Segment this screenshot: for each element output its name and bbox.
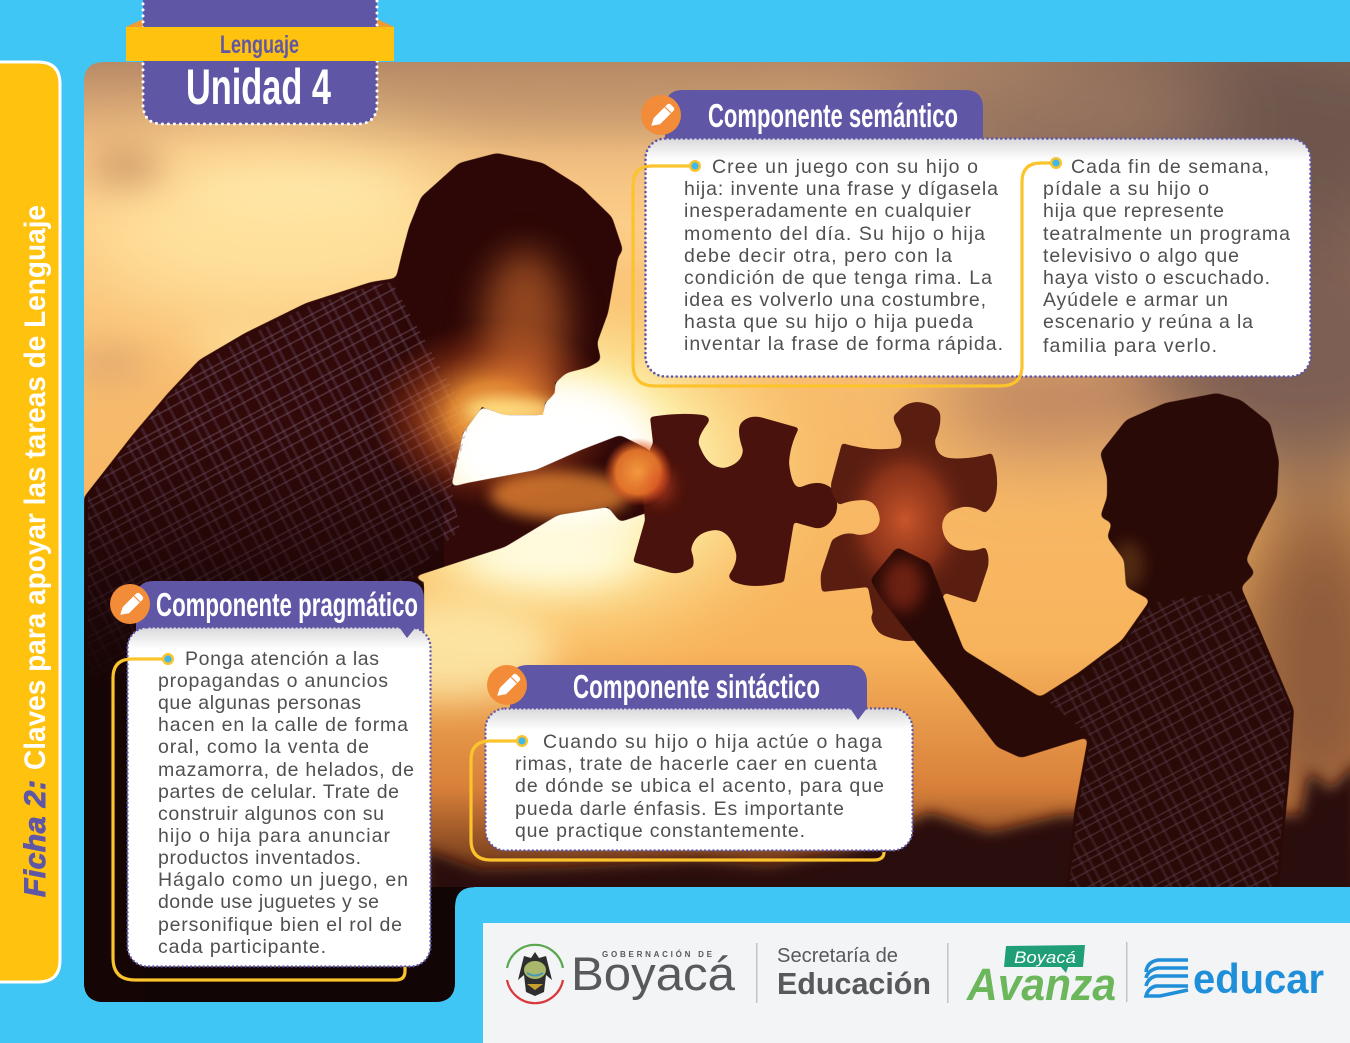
text: tip: Hágalo como un juego, en [158,869,408,891]
text: tip: mazamorra, de helados, de [158,759,414,781]
text: tip: pueda darle énfasis. Es importante [515,798,844,820]
logo: Secretaría de Educación: Secretaría de [777,945,898,967]
lens flare on hand [604,438,674,506]
man silhouette [84,153,649,658]
text: second tip: Ayúdele e armar un [1043,289,1228,311]
plaid shirt [1040,590,1300,890]
title tab: Componente semántico [708,97,958,134]
text: first tip: Cree un juego con su hijo o [712,156,978,178]
boy silhouette [860,385,1300,895]
logo: Boyacá Avanza: Avanza [966,959,1116,1010]
puzzle piece right [821,402,997,641]
text: tip: rimas, trate de hacerle caer en cuenta [515,753,877,775]
text: second tip: haya visto o escuchado. [1043,267,1270,289]
text: tip: propagandas o anuncios [158,670,388,692]
text: second tip: teatralmente un programa [1043,223,1290,245]
logo: Boyacá Avanza [947,943,1116,1010]
panel: Componente sintáctico [471,665,912,860]
connector line [471,741,884,860]
text: first tip: hija: invente una frase y dígasela [684,178,998,200]
text: tip: donde use juguetes y se [158,891,379,913]
logo: Secretaría de Educación [756,943,931,1003]
connector line [113,659,405,980]
text: tip: productos inventados. [158,847,361,869]
plaid shirt [88,282,468,658]
panel: Componente semántico [633,90,1310,386]
text: first tip: inventar la frase de forma rápida. [684,333,1003,355]
text: first tip: condición de que tenga rima. La [684,267,992,289]
title tab [136,581,424,632]
logo: Secretaría de Educación: Educación [777,966,931,1001]
text: tip: oral, como la venta de [158,736,369,758]
unit badge [126,0,394,124]
text: second tip: hija que represente [1043,200,1224,222]
unit badge: Unidad 4 [186,59,331,115]
text: tip: de dónde se ubica el acento, para que [515,775,884,797]
text: first tip: hasta que su hijo o hija pueda [684,311,973,333]
text: tip: Cuando su hijo o hija actúe o haga [543,731,882,753]
text: first tip [684,156,1003,355]
ground and grass [84,600,1350,1017]
bullet dot [162,653,174,665]
puzzle piece left [633,414,837,586]
text: second tip [1043,156,1290,357]
vertical heading: Ficha 2: [19,780,52,897]
text: first tip: idea es volverlo una costumbre, [684,289,986,311]
text: second tip: escenario y reúna a la [1043,311,1253,333]
title tab: Componente pragmático [156,586,418,623]
text: tip [158,648,414,958]
logo: educar: educar [1193,955,1324,1002]
title tab [510,665,867,712]
text: second tip: televisivo o algo que [1043,245,1239,267]
text: tip: personifique bien el rol de [158,914,402,936]
side strip: Ficha 2 [0,62,60,982]
clouds [90,10,1350,830]
icon: pencil [110,584,150,624]
icon: pencil [641,95,681,135]
text: tip: construir algunos con su [158,803,384,825]
text: tip: que practique constantemente. [515,820,805,842]
text: tip: Ponga atención a las [185,648,379,670]
text box [128,627,430,966]
text: tip: hacen en la calle de forma [158,714,408,736]
text: second tip: familia para verlo. [1043,335,1217,357]
panel: Componente pragmático [110,581,430,980]
text: tip: hijo o hija para anunciar [158,825,390,847]
logo bar [483,923,1350,1043]
logo: Gobernación de Boyacá: Boyacá [571,947,736,1000]
text: tip: partes de celular. Trate de [158,781,399,803]
bullet dots [689,157,1062,172]
vertical heading: Claves para apoyar las tareas de Lenguaje [19,205,52,770]
unit badge: Lenguaje [220,31,299,59]
logo: Gobernación de Boyacá [507,945,736,1003]
connector lines [633,163,1056,386]
title tab [665,90,983,142]
icon: pencil [487,665,527,705]
text: first tip: momento del día. Su hijo o hija [684,223,985,245]
text box [646,138,1310,376]
text: tip [515,731,884,842]
bullet dot [516,735,528,747]
text: second tip: pídale a su hijo o [1043,178,1209,200]
text box [486,708,912,850]
text: first tip: debe decir otra, pero con la [684,245,952,267]
sun glow [418,316,798,656]
logo: Gobernación de Boyacá: GOBERNACIÓN DE [602,950,713,959]
text: first tip: inesperadamente en cualquier [684,200,972,222]
logo: educar [1126,942,1324,1002]
sun glow on the man [84,250,630,710]
text: tip: que algunas personas [158,692,361,714]
text: second tip: Cada fin de semana, [1071,156,1269,178]
text: tip: cada participante. [158,936,326,958]
logo: Boyacá Avanza: Boyacá [1014,948,1076,967]
title tab: Componente sintáctico [573,668,820,705]
